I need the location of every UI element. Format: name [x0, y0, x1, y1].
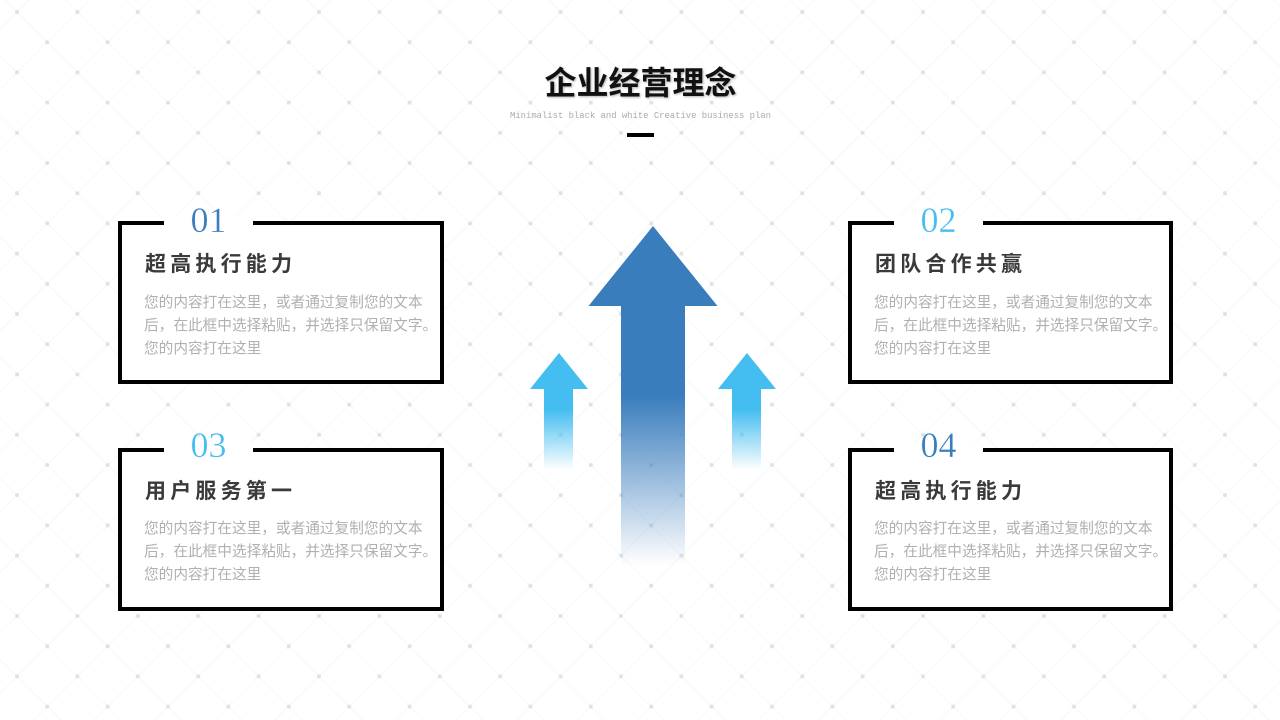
icon: small left arrow	[530, 353, 588, 470]
icon: large centre arrow	[588, 226, 718, 566]
number 04: 04	[920, 425, 956, 465]
body text 04: 后，在此框中选择粘贴，并选择只保留文字。	[874, 544, 1167, 560]
body text 01	[144, 294, 437, 357]
card 04	[848, 448, 1173, 611]
body text 03	[144, 520, 437, 583]
body text 04: 您的内容打在这里，或者通过复制您的文本	[874, 521, 1152, 537]
heading 04: 超高执行能力	[875, 480, 1026, 503]
heading 03: 用户服务第一	[145, 480, 296, 503]
card 02	[848, 221, 1173, 384]
icon: small right arrow	[718, 353, 776, 470]
number 02: 02	[920, 200, 956, 240]
number 03: 03	[190, 425, 226, 465]
body text 01: 后，在此框中选择粘贴，并选择只保留文字。	[144, 318, 437, 334]
body text 02: 后，在此框中选择粘贴，并选择只保留文字。	[874, 318, 1167, 334]
body text 02: 您的内容打在这里，或者通过复制您的文本	[874, 295, 1152, 311]
subtitle: Minimalist black and white Creative business plan	[510, 111, 771, 121]
title: 企业经营理念	[544, 65, 736, 101]
title underline	[627, 133, 654, 137]
card 01	[118, 221, 444, 384]
body text 02: 您的内容打在这里	[874, 341, 991, 357]
body text 03: 您的内容打在这里	[144, 567, 261, 583]
body text 03: 您的内容打在这里，或者通过复制您的文本	[144, 521, 422, 537]
body text 04: 您的内容打在这里	[874, 567, 991, 583]
number 01: 01	[190, 200, 226, 240]
body text 01: 您的内容打在这里，或者通过复制您的文本	[144, 295, 422, 311]
body text 02	[874, 294, 1167, 357]
body text 03: 后，在此框中选择粘贴，并选择只保留文字。	[144, 544, 437, 560]
heading 01: 超高执行能力	[145, 253, 296, 276]
heading 02: 团队合作共赢	[875, 253, 1026, 276]
body text 04	[874, 520, 1167, 583]
card 03	[118, 448, 444, 611]
body text 01: 您的内容打在这里	[144, 341, 261, 357]
